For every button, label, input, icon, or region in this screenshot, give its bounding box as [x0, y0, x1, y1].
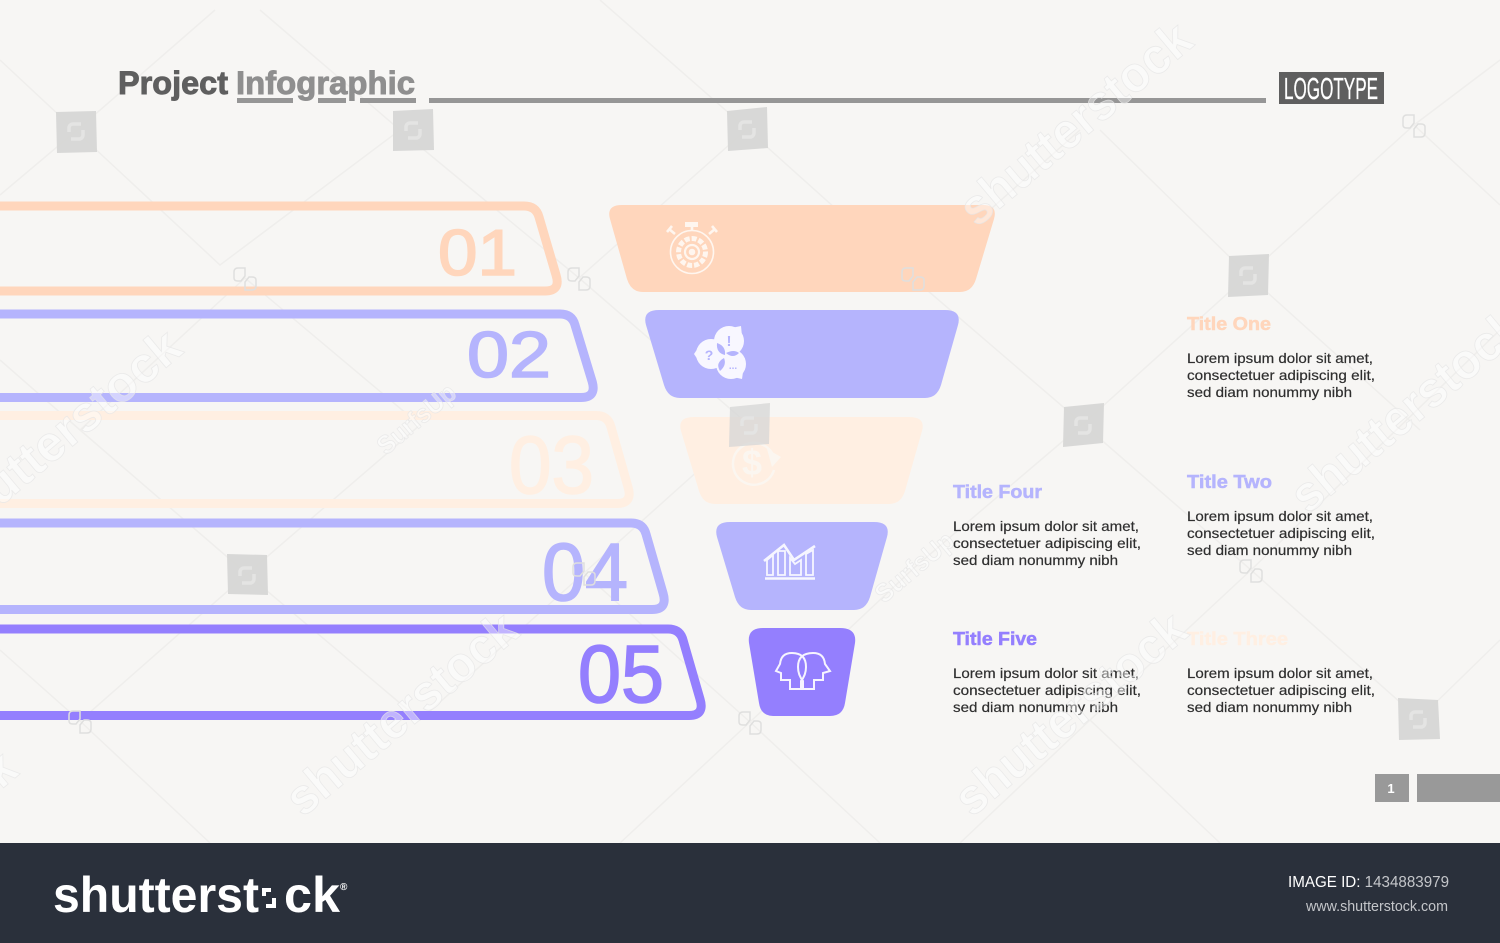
text block: title five: sed diam nonummy nibh — [953, 699, 1118, 715]
icon: stopwatch gear — [667, 222, 717, 274]
page number — [1375, 774, 1500, 802]
bar 04 — [0, 523, 664, 618]
text block: title three: sed diam nonummy nibh — [1187, 699, 1352, 715]
text block: title one: consectetuer adipiscing elit, — [1187, 367, 1375, 383]
text block: title three: consectetuer adipiscing elit, — [1187, 682, 1375, 698]
logotype — [1279, 71, 1384, 106]
text block: title two — [1187, 472, 1375, 558]
funnel segment 3 — [680, 417, 923, 504]
page number: 1 — [1387, 781, 1395, 796]
bar 02: 02 — [467, 318, 551, 391]
bar 03 — [0, 416, 629, 511]
icon: dollar cycle — [733, 442, 781, 485]
footer band — [0, 843, 1500, 943]
title: Project — [118, 65, 228, 101]
text block: title four — [953, 482, 1141, 568]
icon: two heads — [776, 653, 830, 689]
watermark text: SurfsUp — [371, 377, 462, 461]
text block: title three: Lorem ipsum dolor sit amet, — [1187, 665, 1373, 681]
text block: title one: Lorem ipsum dolor sit amet, — [1187, 350, 1373, 366]
footer logo: ® — [340, 882, 348, 893]
icon: three speech bubbles: ... — [729, 361, 737, 372]
logotype: LOGOTYPE — [1284, 71, 1378, 106]
footer logo: shutterst — [53, 867, 259, 923]
text block: title four: Title Four — [953, 482, 1042, 502]
website: www.shutterstock.com — [1305, 899, 1448, 915]
title: Infographic — [236, 65, 415, 101]
funnel segment 1 — [609, 205, 995, 292]
icon: three speech bubbles: ? — [705, 347, 713, 363]
text block: title one: Title One — [1187, 314, 1271, 334]
text block: title two: Lorem ipsum dolor sit amet, — [1187, 508, 1373, 524]
title — [118, 65, 416, 103]
icon: three speech bubbles: ! — [726, 333, 732, 350]
text block: title three: Title Three — [1187, 629, 1288, 649]
text block: title one: sed diam nonummy nibh — [1187, 384, 1352, 400]
text block: title five: Lorem ipsum dolor sit amet, — [953, 665, 1139, 681]
funnel segment 2 — [645, 310, 959, 398]
text block: title four: consectetuer adipiscing elit, — [953, 535, 1141, 551]
bar 01: 01 — [438, 216, 517, 289]
watermark text: shutterstock — [948, 10, 1203, 236]
text block: title one — [1187, 314, 1375, 400]
text block: title five: consectetuer adipiscing elit, — [953, 682, 1141, 698]
funnel segment 4 — [716, 522, 888, 610]
bar 03: 03 — [509, 420, 594, 511]
funnel segment 5 — [749, 628, 855, 716]
watermark text: shutterstock — [943, 600, 1198, 826]
image id: IMAGE ID: 1434883979 — [1288, 874, 1449, 891]
text block: title three — [1187, 629, 1375, 715]
text block: title five — [953, 629, 1141, 715]
bar 05 — [0, 629, 701, 720]
bar 04: 04 — [542, 527, 628, 618]
numbered outline bars — [0, 206, 701, 720]
text block: title two: sed diam nonummy nibh — [1187, 542, 1352, 558]
text block: title two: Title Two — [1187, 472, 1272, 492]
icon: three speech bubbles — [694, 326, 746, 379]
bar 05: 05 — [578, 629, 664, 720]
bar 02 — [0, 314, 593, 398]
icon: dollar cycle: $ — [742, 442, 762, 483]
funnel — [609, 205, 995, 716]
text block: title four: sed diam nonummy nibh — [953, 552, 1118, 568]
text block: title four: Lorem ipsum dolor sit amet, — [953, 518, 1139, 534]
text block: title five: Title Five — [953, 629, 1037, 649]
watermark tiles — [56, 107, 1440, 740]
header rule — [429, 98, 1266, 103]
watermark text: shutterstock — [274, 600, 529, 826]
bar 01 — [0, 206, 557, 291]
footer logo: ck — [284, 867, 340, 923]
icon: bar chart — [764, 545, 815, 578]
text block: title two: consectetuer adipiscing elit, — [1187, 525, 1375, 541]
watermark text: SurfsUp — [869, 525, 960, 609]
